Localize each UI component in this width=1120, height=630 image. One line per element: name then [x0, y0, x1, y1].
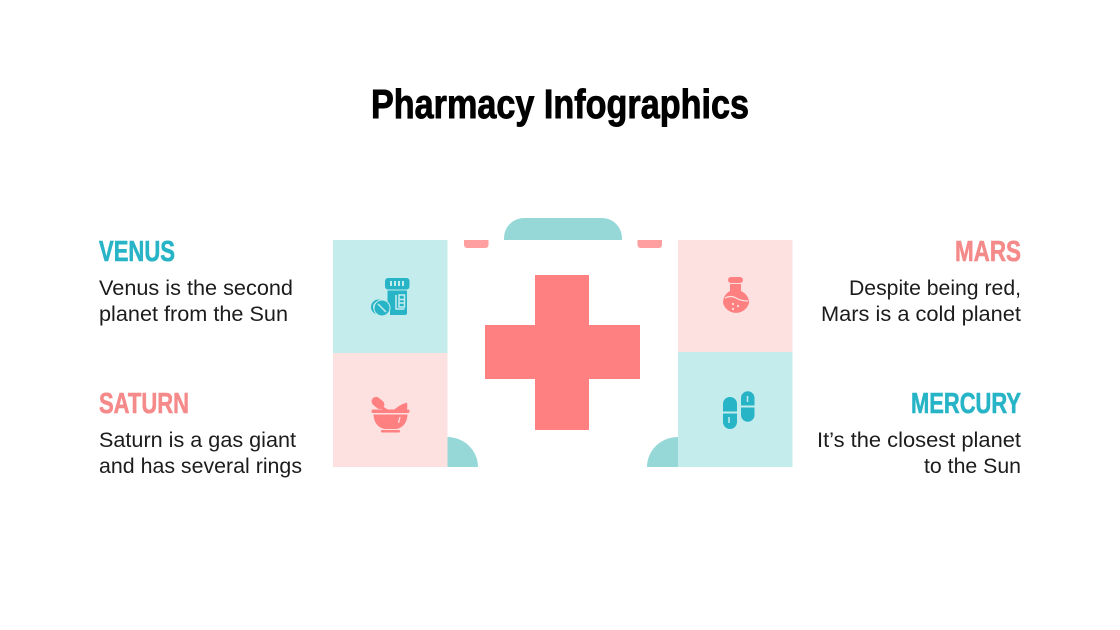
text block: Saturn	[99, 388, 302, 478]
heading: Saturn: SATURN	[99, 388, 189, 420]
red cross	[485, 275, 640, 430]
description: Mars	[821, 276, 1021, 326]
description: Venus: planet from the Sun	[99, 302, 288, 326]
title: Pharmacy Infographics	[371, 81, 749, 127]
icon: flask	[723, 277, 749, 313]
heading: Venus: VENUS	[99, 236, 175, 268]
panel: Saturn	[333, 353, 448, 467]
description: Saturn: and has several rings	[99, 454, 302, 478]
description: Mercury: to the Sun	[924, 454, 1021, 478]
icon: mortar and pestle	[370, 395, 410, 432]
left latch	[464, 240, 489, 248]
right latch	[638, 240, 662, 248]
panel: Mars	[678, 240, 792, 352]
right foot	[647, 437, 678, 467]
left foot	[447, 437, 478, 467]
text block: Mercury	[817, 388, 1021, 478]
description: Mars: Mars is a cold planet	[821, 302, 1021, 326]
first aid kit illustration	[333, 218, 792, 467]
text block: Mars	[821, 236, 1021, 326]
panel: Venus	[333, 240, 448, 353]
text block: Venus	[99, 236, 293, 326]
icon: capsules	[723, 391, 754, 429]
kit handle	[504, 218, 622, 240]
description: Saturn: Saturn is a gas giant	[99, 428, 296, 452]
description: Venus	[99, 276, 293, 326]
panel: Mercury	[678, 352, 792, 467]
description: Saturn	[99, 428, 302, 478]
heading: Mercury: MERCURY	[911, 388, 1021, 420]
description: Mercury	[817, 428, 1021, 478]
heading: Mars: MARS	[955, 236, 1021, 268]
icon: pill bottle	[372, 278, 410, 316]
description: Mercury: It’s the closest planet	[817, 428, 1021, 452]
description: Mars: Despite being red,	[849, 276, 1021, 300]
description: Venus: Venus is the second	[99, 276, 293, 300]
